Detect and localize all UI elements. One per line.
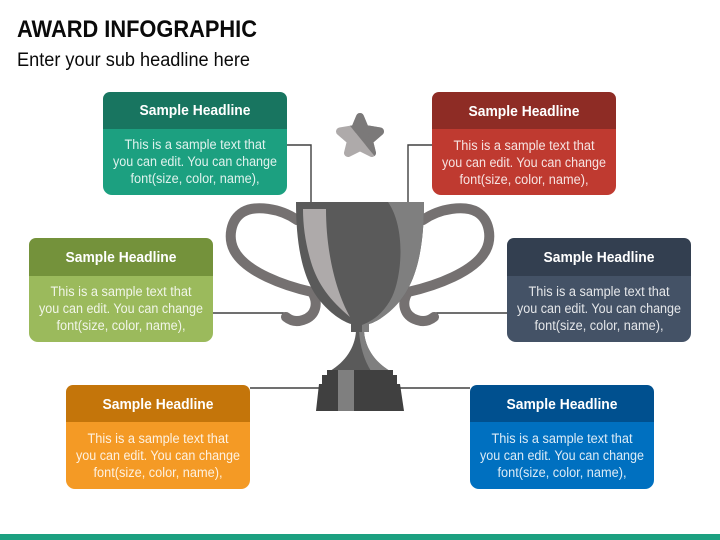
body text: font(size, color, name), xyxy=(94,465,222,480)
panel: top left teal xyxy=(103,92,287,195)
body text xyxy=(517,284,681,333)
panel: bottom left orange xyxy=(66,385,250,489)
body text xyxy=(39,284,203,333)
trophy handles xyxy=(231,208,489,321)
body text: This is a sample text that xyxy=(50,284,192,299)
body text: you can edit. You can change xyxy=(113,154,277,169)
connector lines xyxy=(213,145,507,388)
body text: you can edit. You can change xyxy=(39,301,203,316)
body text xyxy=(76,431,240,480)
body text: you can edit. You can change xyxy=(442,155,606,170)
base band xyxy=(338,370,354,411)
panel: middle right slate xyxy=(507,238,691,342)
body text xyxy=(442,138,606,187)
body text: you can edit. You can change xyxy=(480,448,644,463)
footer bar xyxy=(0,534,720,540)
headline: Sample Headline xyxy=(140,102,250,119)
icon: star xyxy=(340,117,380,153)
panel: top right red xyxy=(432,92,616,195)
headline: Sample Headline xyxy=(544,249,654,266)
panel: middle left green xyxy=(29,238,213,342)
icon: trophy xyxy=(231,202,489,411)
body text: font(size, color, name), xyxy=(56,318,186,333)
trophy base xyxy=(316,370,404,411)
body text: font(size, color, name), xyxy=(534,318,664,333)
body text: font(size, color, name), xyxy=(498,465,626,480)
body text: This is a sample text that xyxy=(124,137,266,152)
headline: Sample Headline xyxy=(468,103,580,120)
cup right shine xyxy=(362,202,424,332)
headline: Sample Headline xyxy=(66,249,176,266)
body text xyxy=(113,137,277,186)
body text: This is a sample text that xyxy=(528,284,670,299)
trophy cup xyxy=(296,202,424,332)
title: AWARD INFOGRAPHIC xyxy=(17,16,257,43)
body text: you can edit. You can change xyxy=(76,448,240,463)
headline: Sample Headline xyxy=(102,396,214,413)
headline: Sample Headline xyxy=(506,396,618,413)
body text: you can edit. You can change xyxy=(517,301,681,316)
subtitle: Enter your sub headline here xyxy=(17,50,250,71)
body text: font(size, color, name), xyxy=(460,172,588,187)
panel: bottom right blue xyxy=(470,385,654,489)
body text: This is a sample text that xyxy=(88,431,229,446)
trophy stem xyxy=(330,331,390,371)
body text xyxy=(480,431,644,480)
cup left highlight xyxy=(303,209,350,317)
body text: font(size, color, name), xyxy=(130,171,260,186)
body text: This is a sample text that xyxy=(492,431,633,446)
body text: This is a sample text that xyxy=(454,138,595,153)
